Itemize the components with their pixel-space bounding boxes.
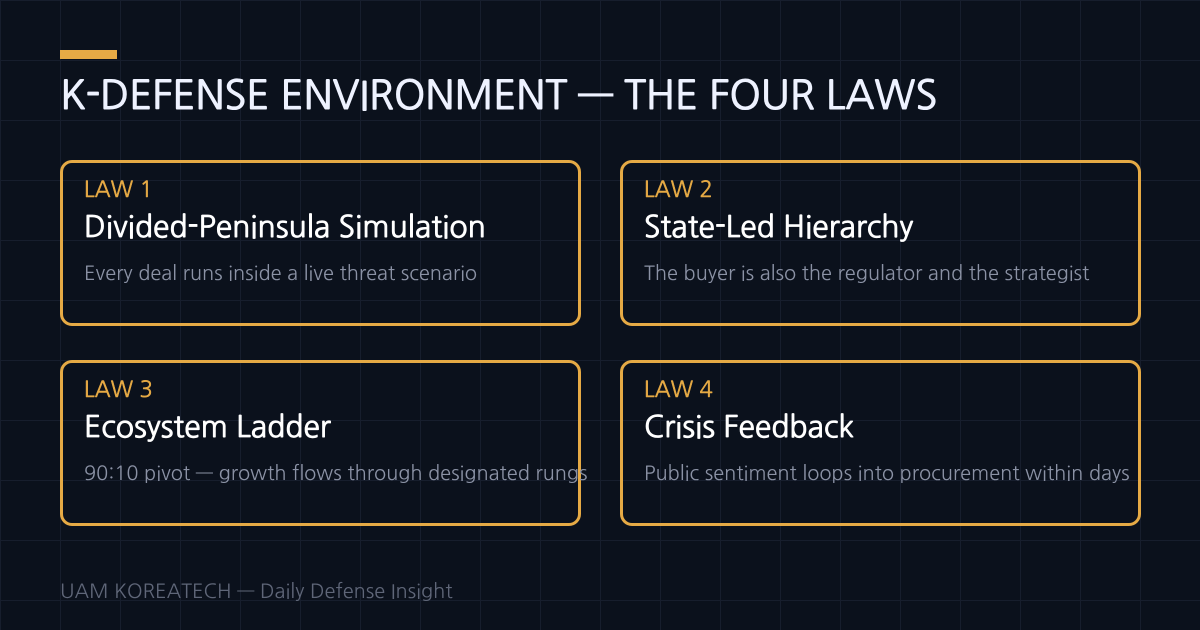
law 3 heading: Ecosystem Ladder — [84, 412, 331, 442]
law 1 label: LAW 1 — [84, 179, 153, 201]
law 3 label: LAW 3 — [84, 379, 153, 401]
footer: UAM KOREATECH — Daily Defense Insight — [60, 581, 452, 601]
panel: law 1 — [60, 160, 581, 326]
law 4 heading: Crisis Feedback — [644, 412, 854, 442]
panel: law 2 — [620, 160, 1141, 326]
panel: law 4 — [620, 360, 1141, 526]
law 2 label: LAW 2 — [644, 179, 713, 201]
law 1 description: Every deal runs inside a live threat scenario — [84, 263, 477, 283]
law 4 label: LAW 4 — [644, 379, 713, 401]
panel: law 3 — [60, 360, 581, 526]
law 2 heading: State-Led Hierarchy — [644, 212, 913, 242]
accent bar — [60, 50, 117, 59]
title: K-DEFENSE ENVIRONMENT — THE FOUR LAWS — [60, 75, 937, 115]
law 1 heading: Divided-Peninsula Simulation — [84, 212, 486, 242]
law 3 description: 90:10 pivot — growth flows through designated rungs — [84, 463, 588, 483]
law 4 description: Public sentiment loops into procurement within days — [644, 463, 1130, 483]
law 2 description: The buyer is also the regulator and the strategist — [644, 263, 1089, 283]
